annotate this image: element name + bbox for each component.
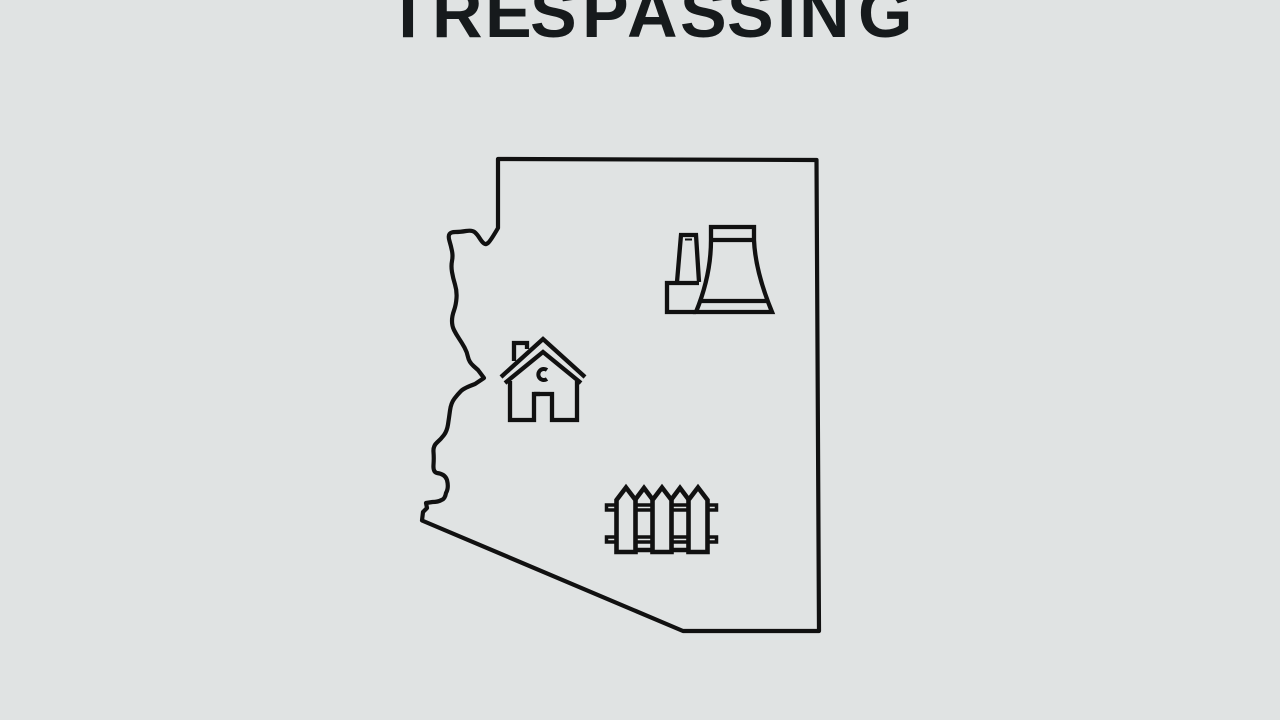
roof inner <box>505 352 581 383</box>
walls and door <box>510 381 577 420</box>
roof outer <box>501 339 585 377</box>
short picket left <box>635 488 653 550</box>
icon: house <box>501 339 585 420</box>
map: Arizona outline <box>422 159 819 631</box>
icon: picket fence <box>606 488 716 552</box>
attic window <box>538 369 547 380</box>
tall picket middle <box>652 488 672 552</box>
chimney <box>514 343 527 361</box>
cooling tower <box>696 227 772 312</box>
fence rails <box>606 505 716 542</box>
plant base <box>667 283 699 312</box>
tall picket right <box>688 488 708 552</box>
tower upper band <box>711 238 754 242</box>
tall picket left <box>616 488 636 552</box>
chimney <box>677 235 699 282</box>
tower lower band <box>700 299 768 303</box>
door lintel <box>534 392 540 396</box>
icon: power plant <box>667 227 772 312</box>
chimney cap <box>685 238 692 240</box>
short picket right <box>671 488 689 550</box>
